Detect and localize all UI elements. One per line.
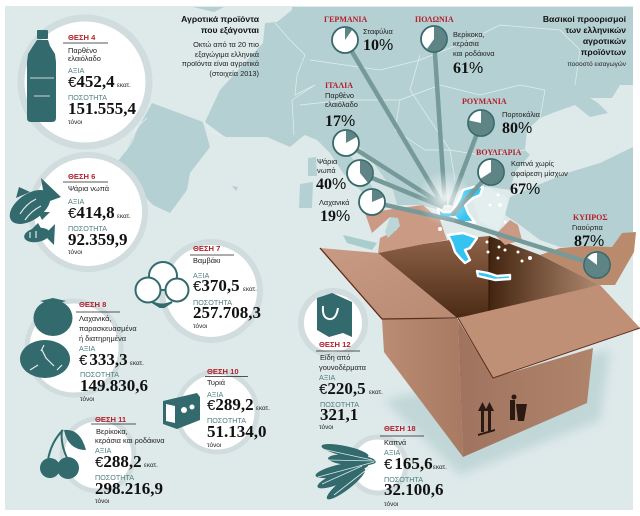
icon: cotton bbox=[136, 262, 188, 307]
block: rank 4 olive oil: €452,4 bbox=[68, 72, 115, 91]
beams bbox=[345, 39, 597, 265]
block: rank 10 cheese: ΑΞΙΑ bbox=[207, 390, 223, 399]
block: rank 11 apricots: τόνοι bbox=[95, 497, 110, 505]
block: rank 11 apricots: κεράσια και ροδάκινα bbox=[95, 436, 165, 445]
heading: agricultural products bbox=[181, 14, 260, 35]
pie: Germany bbox=[332, 27, 358, 53]
cardboard box bbox=[320, 205, 640, 457]
circle: fish bbox=[31, 155, 145, 269]
block: rank 12 furskins: εκατ. bbox=[369, 389, 383, 396]
block: rank 18 tobacco: Καπνά bbox=[384, 438, 407, 447]
label: Bulgaria: Καπνά χωρίς bbox=[511, 159, 555, 168]
block: rank 8 vegetables: παρασκευασμένα bbox=[79, 324, 137, 333]
label: fish: Ψάρια bbox=[317, 157, 338, 166]
glow bbox=[417, 170, 473, 226]
block: rank 6 fish: ΑΞΙΑ bbox=[68, 197, 84, 206]
interior bbox=[378, 236, 489, 318]
label: Bulgaria: αφαίρεση μίσχων bbox=[511, 169, 568, 178]
block: rank 10 cheese: τόνοι bbox=[207, 441, 222, 449]
label: Italy: ΙΤΑΛΙΑ bbox=[325, 81, 353, 90]
block: rank 8 vegetables: τόνοι bbox=[80, 395, 95, 403]
block: rank 8 vegetables: εκατ. bbox=[130, 360, 144, 367]
block: rank 7 cotton: εκατ. bbox=[243, 286, 257, 293]
label: Italy bbox=[325, 81, 358, 130]
pie: Bulgaria bbox=[478, 159, 504, 185]
circle: olive oil bbox=[21, 18, 149, 146]
label: Cyprus bbox=[572, 213, 608, 250]
block: rank 12 furskins: €220,5 bbox=[319, 379, 366, 398]
block: rank 4 olive oil: ΠΟΣΟΤΗΤΑ bbox=[68, 93, 107, 102]
label: vegetables: 19% bbox=[320, 208, 350, 225]
block: rank 18 tobacco: ΑΞΙΑ bbox=[384, 448, 400, 457]
label: Poland bbox=[415, 15, 495, 77]
map tinted brown on back flap bbox=[365, 205, 447, 253]
circle: vegetables bbox=[27, 301, 121, 395]
label: Cyprus: 87% bbox=[574, 233, 604, 250]
label: Romania: ΡΟΥΜΑΝΙΑ bbox=[462, 97, 507, 106]
block: rank 11 apricots: ΠΟΣΟΤΗΤΑ bbox=[95, 473, 134, 482]
heading: main destinations bbox=[543, 14, 627, 68]
block: rank 12 furskins: 321,1 bbox=[320, 405, 358, 424]
block: rank 11 apricots bbox=[91, 415, 165, 505]
left flap bbox=[320, 248, 457, 319]
circle: cheese bbox=[177, 372, 257, 452]
block: rank 6 fish: εκατ. bbox=[117, 213, 131, 220]
label: Germany: 10% bbox=[363, 37, 393, 54]
icon: tomato and lettuce bbox=[20, 298, 72, 378]
block: rank 7 cotton: ΘΕΣΗ 7 bbox=[193, 244, 220, 253]
text: intro bbox=[182, 40, 260, 78]
text: intro: εξαγώγιμα ελληνικά bbox=[195, 50, 260, 59]
block: rank 4 olive oil bbox=[63, 33, 136, 126]
block: rank 4 olive oil: Παρθένο bbox=[68, 46, 97, 55]
block: rank 10 cheese: εκατ. bbox=[256, 405, 270, 412]
label: Romania: Πορτοκάλια bbox=[502, 110, 541, 119]
block: rank 18 tobacco: τόνοι bbox=[384, 500, 399, 508]
label: fish: νωπά bbox=[317, 166, 336, 175]
block: rank 12 furskins: ΑΞΙΑ bbox=[319, 373, 335, 382]
icon: fish bbox=[4, 178, 61, 245]
circle: tobacco bbox=[350, 437, 406, 493]
label: Poland: Βερίκοκα, bbox=[453, 30, 485, 39]
block: rank 4 olive oil: ΑΞΙΑ bbox=[68, 66, 84, 75]
pie: Italy vegetables bbox=[359, 189, 385, 215]
block: rank 11 apricots: ΘΕΣΗ 11 bbox=[95, 415, 127, 424]
right flap bbox=[458, 285, 640, 378]
block: rank 7 cotton: ΑΞΙΑ bbox=[193, 271, 209, 280]
heading: main destinations: των ελληνικών bbox=[565, 25, 626, 35]
block: rank 4 olive oil: 151.555,4 bbox=[68, 99, 136, 118]
heading: main destinations: ποσοστό εισαγωγών bbox=[567, 60, 626, 68]
heading: agricultural products: Αγροτικά προϊόντα bbox=[181, 14, 260, 24]
block: rank 12 furskins: ΘΕΣΗ 12 bbox=[319, 340, 351, 349]
label: Bulgaria: ΒΟΥΛΓΑΡΙΑ bbox=[476, 148, 522, 157]
block: rank 12 furskins bbox=[316, 340, 383, 431]
block: rank 6 fish: ΘΕΣΗ 6 bbox=[68, 172, 95, 181]
block: rank 4 olive oil: τόνοι bbox=[68, 118, 83, 126]
block: rank 6 fish: ΠΟΣΟΤΗΤΑ bbox=[68, 224, 107, 233]
block: rank 18 tobacco: εκατ. bbox=[433, 464, 447, 471]
block: rank 8 vegetables: ή διατηρημένα bbox=[79, 334, 127, 343]
block: rank 4 olive oil: εκατ. bbox=[117, 82, 131, 89]
circle: furskins bbox=[301, 291, 365, 355]
label: Poland: κεράσια bbox=[453, 39, 480, 48]
label: Poland: 61% bbox=[453, 60, 483, 77]
icon: bottle bbox=[27, 30, 56, 122]
block: rank 12 furskins: ΠΟΣΟΤΗΤΑ bbox=[320, 400, 359, 409]
block: rank 6 fish: τόνοι bbox=[68, 248, 83, 256]
map: Greece bbox=[438, 187, 532, 280]
block: rank 11 apricots: Βερίκοκα, bbox=[96, 427, 128, 436]
label: Italy: Παρθένο bbox=[325, 91, 354, 100]
label: Bulgaria bbox=[476, 148, 568, 198]
label: Germany: Σταφύλια bbox=[363, 27, 393, 36]
pie: Italy fish bbox=[347, 160, 373, 186]
pie: Cyprus bbox=[584, 252, 610, 278]
block: rank 12 furskins: Είδη από bbox=[320, 353, 350, 362]
pie: Italy bbox=[333, 130, 359, 156]
label: Cyprus: ΚΥΠΡΟΣ bbox=[573, 213, 608, 222]
block: rank 18 tobacco: ΠΟΣΟΤΗΤΑ bbox=[384, 475, 423, 484]
icon: furskin bag bbox=[317, 293, 352, 337]
block: rank 6 fish bbox=[63, 172, 131, 256]
icon: cheese bbox=[163, 393, 200, 429]
block: rank 8 vegetables: ΠΟΣΟΤΗΤΑ bbox=[80, 370, 119, 379]
label: fish bbox=[316, 157, 346, 193]
label: Germany: ΓΕΡΜΑΝΙΑ bbox=[324, 15, 368, 24]
block: rank 7 cotton: ΠΟΣΟΤΗΤΑ bbox=[193, 298, 232, 307]
icon: tidy man bbox=[510, 394, 527, 421]
label: Italy: 17% bbox=[325, 113, 355, 130]
block: rank 10 cheese: ΘΕΣΗ 10 bbox=[207, 367, 239, 376]
label: Romania bbox=[462, 97, 541, 137]
block: rank 8 vegetables bbox=[76, 300, 148, 403]
block: rank 18 tobacco: ΘΕΣΗ 18 bbox=[384, 424, 416, 433]
block: rank 10 cheese bbox=[205, 367, 270, 449]
block: rank 10 cheese: 51.134,0 bbox=[207, 422, 266, 441]
pie: Poland bbox=[421, 26, 447, 52]
block: rank 10 cheese: ΠΟΣΟΤΗΤΑ bbox=[207, 416, 246, 425]
heading: agricultural products: που εξάγονται bbox=[201, 25, 260, 35]
circle: apricots bbox=[62, 419, 134, 491]
label: Bulgaria: 67% bbox=[510, 181, 540, 198]
block: rank 6 fish: Ψάρια νωπά bbox=[68, 184, 110, 193]
label: fish: 40% bbox=[316, 176, 346, 193]
block: rank 11 apricots: εκατ. bbox=[144, 462, 158, 469]
circle: cotton bbox=[162, 242, 260, 340]
text: intro: προϊόντα είναι αγροτικά bbox=[182, 59, 260, 68]
block: rank 6 fish: €414,8 bbox=[68, 203, 115, 222]
icon: cherries bbox=[40, 430, 86, 479]
block: rank 7 cotton: €370,5 bbox=[193, 276, 240, 295]
block: rank 11 apricots: 298.216,9 bbox=[95, 479, 163, 498]
text: intro: Οκτώ από τα 20 πιο bbox=[193, 40, 259, 49]
heading: main destinations: αγροτικών bbox=[583, 36, 626, 46]
text: intro: (στοιχεία 2013) bbox=[209, 69, 259, 78]
front face bbox=[458, 320, 593, 457]
label: Cyprus: Γιαούρτια bbox=[572, 223, 603, 232]
block: rank 11 apricots: €288,2 bbox=[95, 452, 142, 471]
block: rank 7 cotton bbox=[190, 244, 261, 330]
block: rank 4 olive oil: ΘΕΣΗ 4 bbox=[68, 33, 96, 42]
label: Poland: και ροδάκινα bbox=[453, 49, 495, 58]
heading: main destinations: προϊόντων bbox=[581, 47, 626, 57]
icon: this side up bbox=[478, 402, 495, 436]
block: rank 4 olive oil: ελαιόλαδο bbox=[68, 54, 101, 63]
block: rank 6 fish: 92.359,9 bbox=[68, 230, 128, 249]
pie: Romania bbox=[468, 110, 494, 136]
label: Germany bbox=[324, 15, 393, 54]
heading: main destinations: Βασικοί προορισμοί bbox=[543, 14, 627, 24]
shadow of box bbox=[384, 350, 610, 475]
block: rank 7 cotton: 257.708,3 bbox=[193, 303, 261, 322]
label: Romania: 80% bbox=[502, 120, 532, 137]
block: rank 12 furskins: γουνοδέρματα bbox=[319, 363, 367, 372]
block: rank 8 vegetables: 149.830,6 bbox=[80, 376, 148, 395]
block: rank 10 cheese: €289,2 bbox=[207, 395, 254, 414]
block: rank 8 vegetables: €333,3 bbox=[79, 350, 128, 369]
block: rank 7 cotton: τόνοι bbox=[193, 322, 208, 330]
label: Italy: ελαιόλαδο bbox=[325, 100, 358, 109]
block: rank 18 tobacco: €165,6 bbox=[384, 454, 433, 473]
block: rank 10 cheese: Τυριά bbox=[207, 378, 226, 387]
block: rank 8 vegetables: ΑΞΙΑ bbox=[79, 344, 95, 353]
left face bbox=[382, 319, 463, 457]
label: vegetables bbox=[319, 198, 350, 225]
block: rank 18 tobacco bbox=[380, 424, 447, 508]
label: Poland: ΠΟΛΩΝΙΑ bbox=[415, 15, 454, 24]
block: rank 7 cotton: Βαμβάκι bbox=[193, 256, 221, 265]
block: rank 8 vegetables: Λαχανικά, bbox=[79, 314, 111, 323]
block: rank 18 tobacco: 32.100,6 bbox=[384, 480, 444, 499]
block: rank 12 furskins: τόνοι bbox=[319, 423, 334, 431]
block: rank 8 vegetables: ΘΕΣΗ 8 bbox=[79, 300, 106, 309]
block: rank 11 apricots: ΑΞΙΑ bbox=[95, 446, 111, 455]
Aegean light bbox=[472, 186, 508, 230]
icon: tobacco leaves bbox=[314, 441, 376, 503]
label: vegetables: Λαχανικά bbox=[319, 198, 350, 207]
